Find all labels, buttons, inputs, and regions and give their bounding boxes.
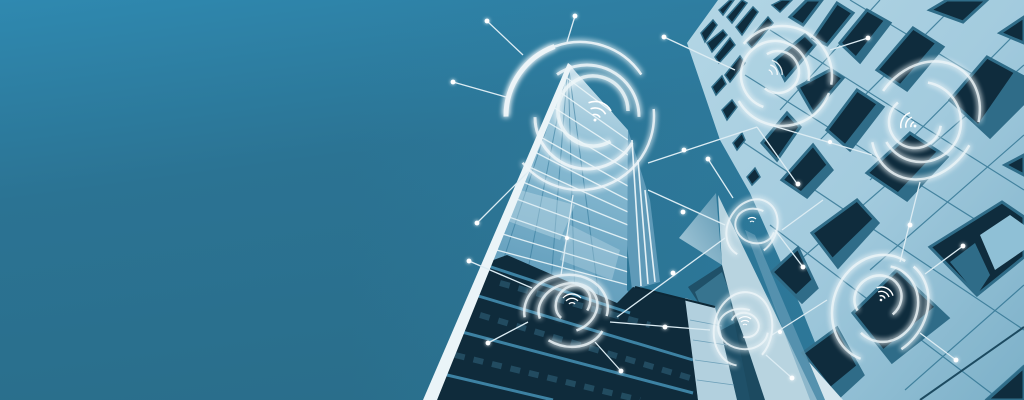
facade windows [701, 0, 1024, 400]
icon: wifi main tower [583, 98, 613, 126]
reflection dark glass [437, 255, 698, 400]
signal rings: upper right building [712, 6, 852, 146]
right office building facade [687, 0, 1024, 400]
signal rings: lower centre [708, 288, 778, 370]
icon: wifi lower tower [563, 294, 581, 304]
window panes [795, 20, 1024, 398]
network connection lines [453, 16, 963, 378]
icon: wifi lower centre [739, 317, 751, 325]
signal rings: far right building [848, 40, 1002, 200]
icon: wifi lower right building [872, 284, 895, 305]
third tower with pyramid roof [679, 193, 843, 400]
signal rings: lower right building [809, 237, 949, 379]
signal rings: lower tower [512, 259, 620, 361]
centre low-rise building [635, 287, 737, 400]
signal rings: third tower top [716, 190, 788, 266]
icon: wifi far right building [898, 111, 921, 134]
network node dots [451, 14, 965, 380]
signal rings: main tower [485, 21, 675, 211]
icon: wifi third tower top [748, 217, 756, 222]
reflection bands [447, 265, 693, 400]
tower mullions and floor lines [497, 72, 628, 295]
main glass tower [423, 63, 700, 400]
tower left edge [423, 63, 572, 400]
icon: wifi upper right building [765, 58, 785, 80]
